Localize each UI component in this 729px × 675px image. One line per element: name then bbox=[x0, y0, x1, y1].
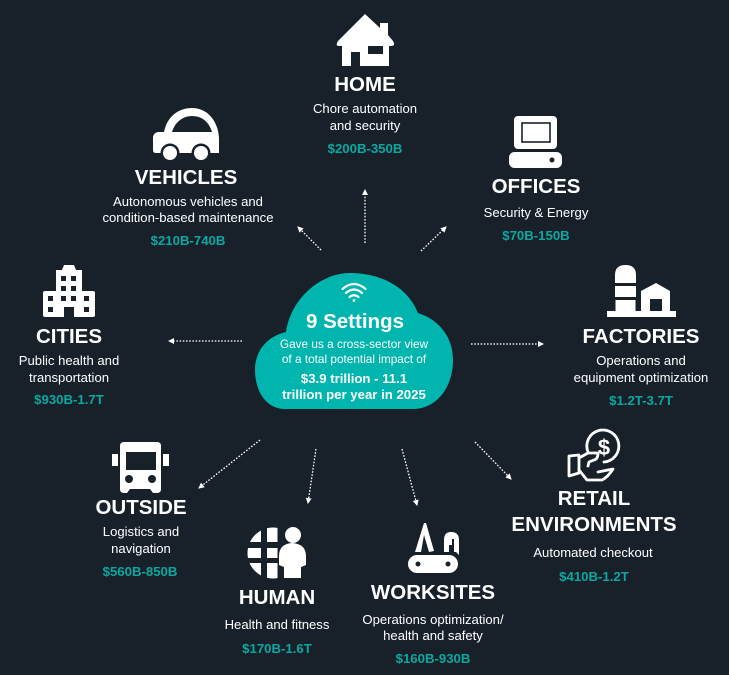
heading: VEHICLES bbox=[135, 166, 237, 189]
value: $210B-740B bbox=[151, 233, 225, 248]
description: Security & Energy bbox=[484, 205, 589, 220]
heading: WORKSITES bbox=[371, 581, 495, 604]
icon: computer bbox=[509, 116, 562, 168]
panel: retail environments bbox=[511, 430, 677, 584]
heading: ENVIRONMENTS bbox=[511, 513, 677, 536]
value: $160B-930B bbox=[396, 651, 470, 666]
description: equipment optimization bbox=[574, 370, 708, 385]
icon: hand with coin bbox=[569, 430, 619, 480]
cloud shape bbox=[255, 273, 453, 409]
cloud description: Gave us a cross-sector view bbox=[280, 337, 429, 351]
description bbox=[574, 353, 708, 385]
panel: central cloud bbox=[255, 273, 453, 409]
icon: car bbox=[153, 108, 219, 162]
panel: human bbox=[225, 527, 330, 656]
heading: FACTORIES bbox=[583, 325, 699, 348]
value: $170B-1.6T bbox=[242, 641, 312, 656]
icon: bus bbox=[112, 442, 169, 493]
description: Operations optimization/ bbox=[362, 612, 504, 627]
arrows from the cloud to the settings bbox=[169, 190, 543, 505]
value: $410B-1.2T bbox=[559, 569, 629, 584]
description: Operations and bbox=[596, 353, 686, 368]
description bbox=[362, 612, 504, 643]
value: $200B-350B bbox=[328, 141, 402, 156]
heading: RETAIL bbox=[558, 487, 630, 510]
heading: HUMAN bbox=[239, 586, 315, 609]
panel: vehicles bbox=[102, 108, 274, 248]
icon: multi-tool bbox=[408, 523, 459, 573]
panel: cities bbox=[19, 265, 119, 407]
description: and security bbox=[330, 118, 401, 133]
value: $1.2T-3.7T bbox=[609, 393, 673, 408]
icon: house bbox=[337, 14, 394, 66]
description bbox=[19, 353, 119, 385]
icon: buildings bbox=[43, 265, 95, 317]
cloud total impact bbox=[282, 371, 426, 402]
description: Automated checkout bbox=[533, 545, 653, 560]
heading: HOME bbox=[334, 73, 396, 96]
description: Chore automation bbox=[313, 101, 417, 116]
icon: hand with coin: $ bbox=[598, 435, 610, 460]
value: $560B-850B bbox=[103, 564, 177, 579]
heading: OUTSIDE bbox=[95, 496, 187, 519]
cloud description bbox=[280, 337, 429, 366]
description: Health and fitness bbox=[225, 617, 330, 632]
value: $70B-150B bbox=[502, 228, 570, 243]
description: navigation bbox=[111, 541, 171, 556]
cloud total impact: $3.9 trillion - 11.1 bbox=[301, 371, 407, 386]
panel: outside bbox=[95, 442, 187, 579]
panel: home bbox=[313, 14, 417, 156]
panel: worksites bbox=[362, 523, 504, 666]
description: transportation bbox=[29, 370, 109, 385]
icon: globe and person bbox=[247, 527, 306, 579]
heading: CITIES bbox=[36, 325, 102, 348]
icon: wifi bbox=[342, 284, 366, 301]
heading bbox=[511, 487, 677, 536]
cloud heading: 9 Settings bbox=[306, 310, 404, 333]
icon: silo and barn bbox=[607, 265, 676, 317]
description: health and safety bbox=[383, 628, 483, 643]
panel: factories bbox=[574, 265, 708, 408]
value: $930B-1.7T bbox=[34, 392, 104, 407]
description: Logistics and bbox=[103, 524, 179, 539]
description: Public health and bbox=[19, 353, 119, 368]
description: Autonomous vehicles and bbox=[113, 194, 263, 209]
description bbox=[103, 524, 179, 556]
panel: offices bbox=[484, 116, 589, 243]
description bbox=[313, 101, 417, 133]
cloud description: of a total potential impact of bbox=[282, 352, 427, 366]
cloud total impact: trillion per year in 2025 bbox=[282, 387, 426, 402]
description bbox=[102, 194, 274, 225]
heading: OFFICES bbox=[492, 175, 580, 198]
description: condition-based maintenance bbox=[102, 210, 274, 225]
